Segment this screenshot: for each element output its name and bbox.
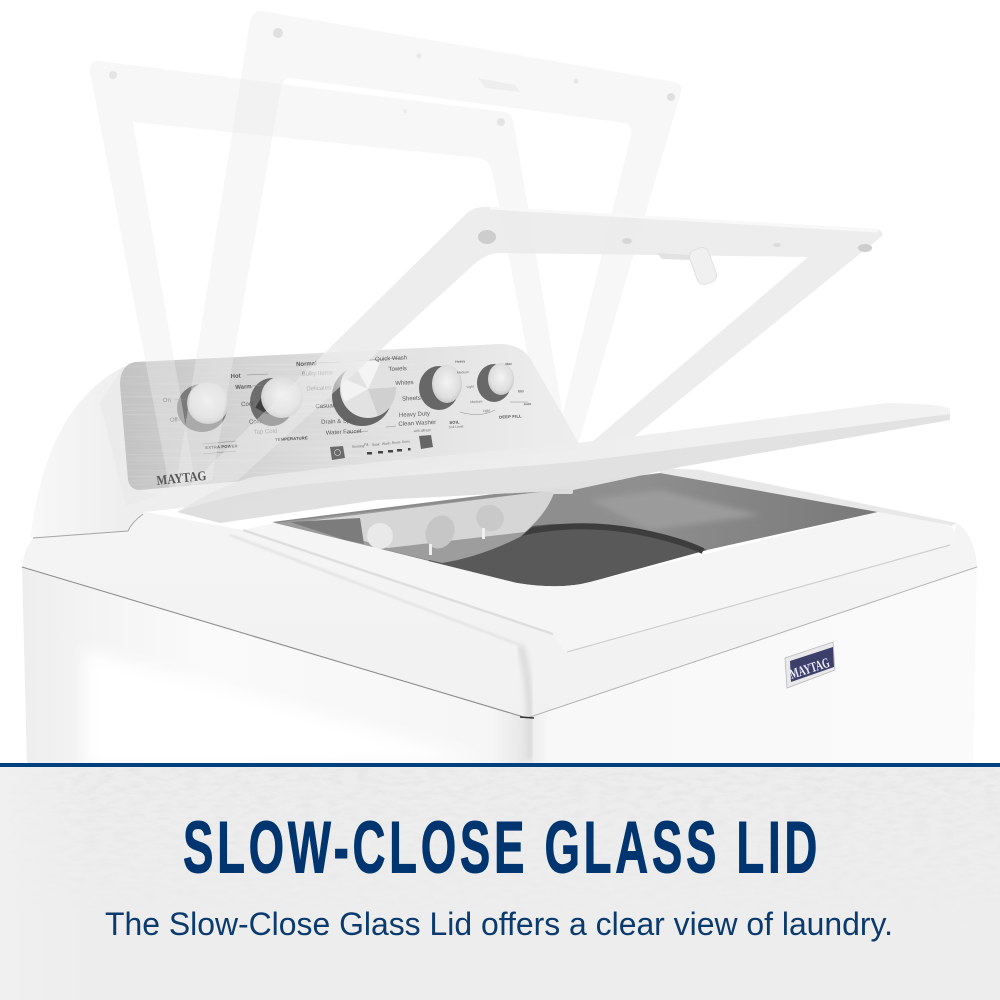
lid screw — [858, 244, 872, 252]
washer console housing — [30, 344, 580, 538]
panel labels: Soil Level — [449, 424, 464, 429]
panel labels: Quick Wash — [375, 355, 407, 363]
panel labels: Bulky Items — [302, 370, 333, 378]
panel Maytag logo: MAYTAG — [156, 468, 207, 488]
caption band — [0, 767, 1000, 1000]
lid screw — [109, 71, 117, 79]
panel labels: Whites — [395, 380, 414, 387]
panel labels: Mid — [518, 389, 524, 394]
cabinet front right face — [525, 567, 977, 765]
panel labels: Clean Washer — [398, 420, 436, 428]
knob: temperature — [250, 376, 303, 426]
panel labels: with affresh — [414, 428, 431, 433]
panel labels: Delicates — [306, 385, 331, 393]
closed lid glass rim — [243, 512, 955, 653]
lid screw — [773, 243, 781, 247]
tub opening — [272, 473, 878, 586]
panel labels: Max — [505, 362, 512, 366]
panel labels: On — [163, 398, 171, 404]
panel labels: Towels — [388, 366, 407, 373]
lid top edge highlight — [490, 208, 878, 231]
cycle status lights: Soak — [372, 442, 380, 447]
panel labels: DEEP FILL — [499, 413, 522, 420]
drum rim — [500, 526, 703, 551]
knob: cycle selector — [332, 360, 396, 426]
panel labels: Heavy Duty — [399, 411, 430, 419]
lid hinge tab — [687, 246, 719, 286]
control panel — [115, 340, 577, 495]
lid screw — [403, 109, 407, 113]
raised lid back position — [90, 61, 568, 490]
deck back right edge — [660, 468, 957, 527]
tub highlight — [590, 490, 760, 530]
rim edge shadow — [567, 545, 950, 652]
panel labels: Heavy — [455, 359, 465, 364]
lid screw — [273, 28, 283, 38]
panel labels: Off — [170, 417, 178, 424]
panel labels: Hot — [231, 374, 241, 380]
lid screw — [574, 78, 578, 84]
cabinet front highlight — [85, 650, 480, 770]
power button — [330, 446, 345, 460]
panel labels: Water Faucet — [326, 429, 362, 437]
lid screw — [667, 93, 675, 101]
console left bezel — [100, 367, 160, 506]
panel labels: Light — [483, 409, 490, 413]
panel labels: Light — [466, 385, 474, 389]
lid screw — [416, 54, 422, 58]
knob: extra power — [177, 382, 229, 432]
band left fade — [0, 767, 90, 1000]
drum — [420, 524, 707, 586]
cycle status lights: Wash — [382, 441, 391, 446]
panel reflection in glass — [275, 490, 555, 563]
panel labels: EXTRA POWER — [205, 443, 238, 450]
knob: deep fill — [477, 363, 514, 402]
reflected knob — [472, 500, 508, 536]
panel labels: Warm — [235, 384, 252, 391]
navy divider — [0, 763, 1000, 767]
front Maytag badge — [785, 642, 835, 688]
reflected knob stem — [429, 544, 432, 555]
subtitle: The Slow-Close Glass Lid offers a clear view of laundry. — [105, 906, 893, 942]
cycle status lights: Done — [402, 439, 410, 444]
panel labels: Medium — [457, 370, 469, 375]
lid bracket ghost — [478, 78, 520, 92]
cabinet front left face — [22, 567, 527, 765]
panel labels: Casuals — [315, 403, 337, 410]
cycle status lights: Fill — [364, 443, 369, 447]
lid latch — [552, 489, 573, 494]
reflected knob — [420, 511, 460, 553]
panel labels: Sheets — [402, 396, 421, 403]
reflected knob — [367, 523, 393, 549]
panel labels: Cool — [241, 401, 254, 408]
cycle status lights — [352, 439, 410, 454]
front Maytag badge: MAYTAG — [788, 656, 832, 683]
reflected knob stem — [482, 528, 485, 539]
panel labels: Medium — [470, 399, 483, 404]
panel labels — [161, 349, 533, 452]
deck corner shading — [520, 645, 530, 760]
title: SLOW-CLOSE GLASS LID — [183, 807, 821, 888]
panel labels: Normal — [296, 361, 317, 368]
band texture — [0, 768, 1000, 928]
knob: soil level — [419, 365, 462, 410]
panel labels: Auto — [523, 402, 531, 406]
lid screw — [622, 238, 632, 244]
cycle status lights: Sensing — [352, 444, 364, 449]
panel labels: Tap Cold — [254, 429, 277, 436]
rim left edge shadow — [243, 530, 553, 634]
closed-swing lid — [177, 403, 950, 523]
raised lid upright position — [175, 11, 681, 490]
lid screw — [478, 230, 496, 244]
panel labels: TEMPERATURE — [275, 435, 308, 442]
lid screw — [497, 118, 505, 126]
reflected dark knob band — [290, 518, 364, 544]
panel labels: Drain & Spin — [321, 418, 355, 426]
panel labels: SOIL — [449, 419, 460, 425]
cabinet top deck — [22, 512, 977, 718]
mid-swing lid frame — [185, 207, 882, 490]
panel leader lines — [175, 358, 528, 454]
rim left inner line — [230, 535, 520, 645]
lid notch — [657, 253, 690, 260]
panel labels: Cold — [249, 419, 262, 426]
seam lines — [22, 514, 977, 718]
start button — [419, 435, 433, 449]
lid underside shading — [177, 414, 950, 523]
cycle status lights: Rinse — [392, 440, 401, 445]
